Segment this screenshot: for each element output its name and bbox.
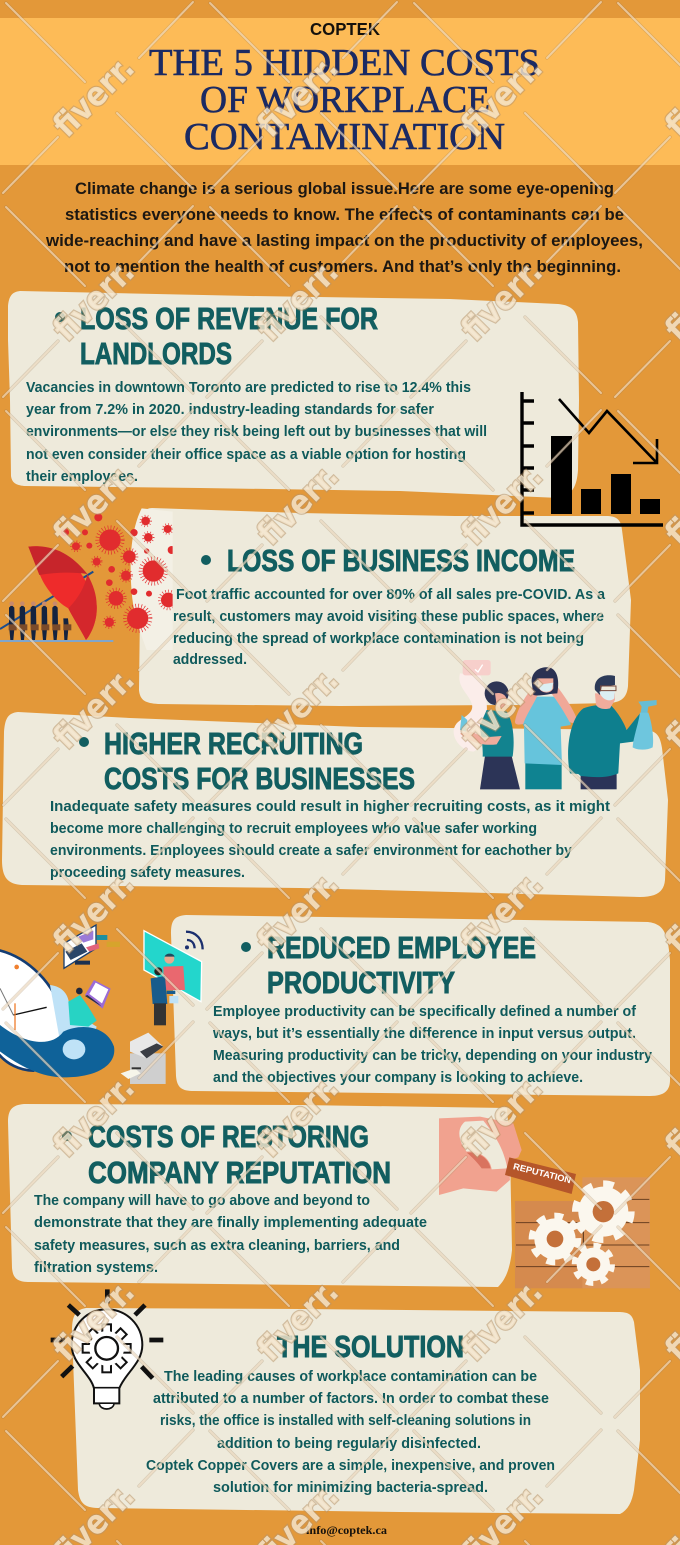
intro text — [45, 180, 643, 276]
panel: costs of restoring company reputation — [8, 1104, 512, 1287]
heading: LOSS OF REVENUE FOR — [80, 302, 378, 336]
heading bullet — [62, 1131, 72, 1141]
body text — [50, 799, 610, 881]
heading bullet — [241, 942, 251, 952]
watermark: fiverr. — [249, 252, 346, 349]
body text: become more challenging to recruit employees who value safer working — [50, 821, 537, 837]
heading — [80, 302, 378, 371]
body text: The leading causes of workplace contamination can be — [164, 1369, 537, 1385]
panel: loss of revenue for landlords — [8, 291, 579, 498]
watermark: fiverr. — [453, 1068, 550, 1165]
watermark: fiverr. — [453, 48, 550, 145]
watermark: fiverr. — [249, 456, 346, 553]
body text: not even consider their office space as a viable option for hosting — [26, 447, 466, 463]
body text: safety measures, such as extra cleaning, barriers, and — [34, 1238, 400, 1254]
icon: wifi — [185, 932, 203, 949]
canopy — [28, 546, 97, 640]
handle — [0, 572, 93, 629]
body text — [34, 1193, 427, 1276]
body text: their employees. — [26, 469, 138, 485]
footer contact: info@coptek.ca — [306, 1523, 387, 1537]
body text: proceeding safety measures. — [50, 865, 245, 881]
heading: LANDLORDS — [80, 337, 232, 371]
watermark: fiverr. — [453, 660, 550, 757]
body text — [26, 380, 487, 485]
monitor — [64, 925, 120, 968]
body text: result, customers may avoid visiting these public spaces, where — [173, 609, 604, 625]
heading bullet — [201, 555, 211, 565]
reputation block — [505, 1157, 576, 1194]
illustration: office productivity scene — [0, 925, 203, 1084]
watermark: fiverr. — [249, 864, 346, 961]
heading bullet — [55, 312, 65, 322]
intro text: Climate change is a serious global issue.Here are some eye-opening — [75, 180, 614, 198]
title band — [0, 18, 680, 165]
gear — [83, 1324, 131, 1372]
heading: COSTS FOR BUSINESSES — [104, 762, 415, 796]
body text: filtration systems. — [34, 1260, 158, 1276]
watermark: fiverr. — [453, 864, 550, 961]
icon: lightbulb with gear — [51, 1289, 163, 1409]
heading — [267, 931, 536, 1000]
virus cluster — [61, 513, 176, 629]
title — [149, 42, 540, 158]
panel: higher recruiting costs — [2, 712, 668, 897]
body text — [146, 1369, 555, 1496]
panel: reduced employee productivity — [171, 915, 670, 1096]
hand — [439, 1117, 522, 1195]
watermark: fiverr. — [45, 48, 142, 145]
rays — [51, 1289, 163, 1378]
watermark: fiverr. — [249, 48, 346, 145]
body text: reducing the spread of workplace contamination is not being — [173, 631, 584, 647]
watermark: fiverr. — [453, 1272, 550, 1369]
body text: addition to being regularly disinfected. — [217, 1436, 481, 1452]
body text: Vacancies in downtown Toronto are predicted to rise to 12.4% this — [26, 380, 471, 396]
man with spray bottle — [568, 675, 657, 789]
intro text: wide-reaching and have a lasting impact on the productivity of employees, — [45, 232, 643, 250]
heading: COMPANY REPUTATION — [88, 1156, 391, 1190]
watermark: fiverr. — [45, 456, 142, 553]
video call screen — [144, 931, 202, 1025]
heading bullet — [79, 737, 89, 747]
wooden gear puzzle — [515, 1177, 650, 1288]
body text: The company will have to go above and beyond to — [34, 1193, 370, 1209]
title: THE 5 HIDDEN COSTS — [149, 42, 540, 84]
woman with tablet — [460, 681, 520, 789]
intro text: not to mention the health of customers. And that’s only the beginning. — [64, 258, 621, 276]
workers — [9, 601, 71, 640]
heading: REDUCED EMPLOYEE — [267, 931, 536, 965]
clock — [0, 950, 64, 1071]
illustration: reputation block and gears — [439, 1117, 650, 1288]
watermark: fiverr. — [249, 1272, 346, 1369]
watermark: fiverr. — [45, 864, 142, 961]
person with laptop — [68, 980, 111, 1027]
body text: Measuring productivity can be tricky, depending on your industry — [213, 1048, 652, 1064]
body text: Inadequate safety measures could result in higher recruiting costs, as it might — [50, 799, 610, 815]
illustration: umbrella shielding workers from viruses — [0, 508, 177, 650]
body text: addressed. — [173, 652, 247, 668]
brand name: COPTEK — [310, 19, 380, 39]
intro text: statistics everyone needs to know. The effects of contaminants can be — [65, 206, 624, 224]
copier — [121, 1033, 166, 1084]
illustration: people wearing masks — [454, 660, 657, 789]
heading: COSTS OF RESTORING — [88, 1120, 369, 1154]
body text: and the objectives your company is looking to achieve. — [213, 1070, 583, 1086]
watermark: fiverr. — [45, 660, 142, 757]
blue base — [0, 985, 114, 1077]
watermark: fiverr. — [249, 660, 346, 757]
body text: environments. Employees should create a safer environment for eachother by — [50, 843, 572, 859]
heading: THE SOLUTION — [277, 1330, 464, 1364]
watermark: fiverr. — [45, 252, 142, 349]
body text — [173, 587, 606, 668]
panel: the solution — [72, 1308, 640, 1514]
body text: environments—or else they risk being left out by businesses that will — [26, 424, 487, 440]
heading — [104, 727, 415, 796]
woman in mask — [515, 667, 577, 789]
ground — [0, 640, 113, 642]
body text: Employee productivity can be specifically defined a number of — [213, 1004, 636, 1020]
body text: risks, the office is installed with self-cleaning solutions in — [160, 1413, 531, 1429]
smoke and notification — [454, 673, 487, 752]
title: CONTAMINATION — [184, 116, 505, 158]
body text — [212, 1004, 652, 1086]
heading: PRODUCTIVITY — [267, 966, 455, 1000]
heading: HIGHER RECRUITING — [104, 727, 363, 761]
heading: LOSS OF BUSINESS INCOME — [227, 544, 575, 578]
body text: Coptek Copper Covers are a simple, inexpensive, and proven — [146, 1458, 555, 1474]
watermark: fiverr. — [249, 1068, 346, 1165]
body text: solution for minimizing bacteria-spread. — [213, 1480, 488, 1496]
panel: loss of business income — [139, 508, 631, 706]
bulb — [72, 1309, 142, 1403]
body text: ways, but it’s essentially the difference in input versus output. — [212, 1026, 636, 1042]
icon: declining bar chart — [522, 392, 663, 525]
reputation block: REPUTATION — [512, 1161, 572, 1185]
heading — [88, 1120, 391, 1190]
title: OF WORKPLACE — [200, 79, 490, 121]
body text: Foot traffic accounted for over 80% of all sales pre-COVID. As a — [176, 587, 606, 603]
body text: attributed to a number of factors. In order to combat these — [153, 1391, 549, 1407]
watermark: fiverr. — [453, 252, 550, 349]
body text: demonstrate that they are finally implementing adequate — [34, 1215, 427, 1231]
watermark: fiverr. — [45, 1068, 142, 1165]
watermark: fiverr. — [45, 1272, 142, 1369]
watermark: fiverr. — [453, 456, 550, 553]
body text: year from 7.2% in 2020. industry-leading standards for safer — [26, 402, 434, 418]
spray bottle — [638, 700, 657, 713]
